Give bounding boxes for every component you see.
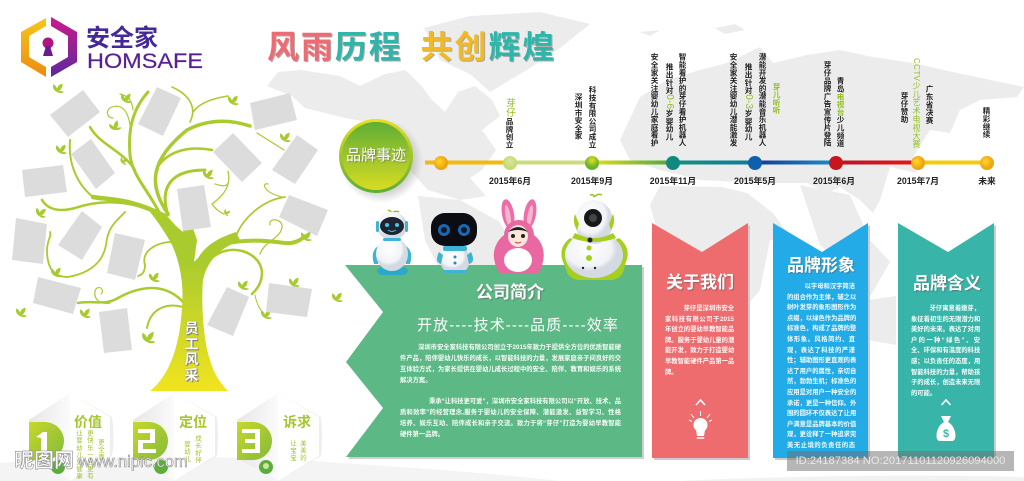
- icon: chevron: [696, 400, 705, 405]
- text: 芽仔是深圳市安全: [684, 305, 734, 312]
- value card 2: [133, 398, 218, 480]
- value card 1: [29, 397, 114, 480]
- logo: 安全家: [86, 25, 158, 52]
- timeline dates: 未来: [978, 176, 996, 186]
- text: 观，更诠释了一种追求完: [787, 431, 856, 438]
- timeline event text: 青岛 电视台 少儿频道: [836, 77, 845, 147]
- company description: [400, 343, 621, 438]
- text: 然，勃勃生机；标准色的: [787, 378, 856, 385]
- value card 3: [237, 398, 322, 480]
- text: 美无止境的负责任的态: [787, 442, 855, 449]
- text: 户满意是品牌基本的价值: [787, 421, 856, 428]
- values slogan: 开放----技术----品质----效率: [417, 317, 619, 334]
- text: 的组合作为主体，辅之以: [787, 294, 856, 301]
- text: 家科技有限公司于2015: [665, 316, 734, 323]
- timeline event text: 智能看护的芽仔看护机器人: [678, 53, 687, 147]
- timeline dates: 2015年6月: [813, 176, 855, 186]
- timeline event text: 芽仔赞助: [900, 92, 909, 123]
- company description: 深圳市安全家科技有限公司创立于2015年致力于提供全方位的优质智能硬: [418, 344, 621, 351]
- robot: pink rabbit: [494, 198, 544, 274]
- text: 年创立的婴幼早教智能品: [665, 326, 734, 333]
- timeline: [425, 156, 994, 170]
- panel: about us: [652, 223, 750, 460]
- timeline dates: 2015年7月: [897, 176, 939, 186]
- text: 能开发，致力于打造婴幼: [665, 347, 734, 354]
- text: [911, 304, 980, 397]
- text: [787, 282, 856, 449]
- icon: money bag: [937, 416, 955, 441]
- text: 观，表达了科技的严谨: [787, 347, 855, 354]
- logo: HOMSAFE: [87, 50, 203, 73]
- company description: 互体验方式，为家长提供在婴幼儿成长过程中的安全、陪伴、教育和娱乐的系统: [400, 366, 621, 373]
- panel: company profile: [345, 265, 644, 459]
- text: 的可能。: [911, 390, 936, 397]
- timeline dates: 2015年9月: [571, 176, 613, 186]
- value card 3: 让宝宝: [289, 440, 296, 461]
- text: 象征着初生的无限潜力和: [911, 316, 980, 323]
- timeline dates: 2015年11月: [650, 176, 696, 186]
- timeline event text: 推出针对 0-3 岁婴幼儿: [743, 63, 754, 140]
- tree branches: [42, 87, 306, 328]
- timeline dates: 2015年6月: [489, 176, 531, 186]
- text: 子的成长，创造未来无限: [911, 379, 980, 386]
- timeline event text: 精彩继续: [982, 107, 991, 138]
- text: 围的圆环不仅表达了让用: [787, 410, 856, 417]
- icon: chevron: [942, 400, 950, 405]
- leaves: [16, 84, 343, 343]
- title: 风雨历程 共创辉煌: [267, 29, 556, 65]
- timeline event text: 安全家关注婴幼儿潜能激发: [729, 53, 738, 147]
- robot: black screen: [431, 213, 477, 273]
- text: 牌。: [665, 369, 678, 376]
- photo frames: [12, 87, 328, 353]
- logo: [21, 17, 203, 77]
- text: 感；以负责任的态度，用: [911, 358, 980, 365]
- text: 户的一种“绿色”、安: [911, 337, 980, 344]
- value card 2: 成长好伴: [194, 435, 201, 463]
- panel heading: 公司简介: [476, 283, 544, 302]
- heading: 品牌含义: [913, 274, 981, 293]
- robots: [372, 194, 628, 280]
- value card 1: 让婴幼儿更健康: [75, 430, 82, 480]
- heading: 关于我们: [666, 273, 734, 292]
- value card 2: 定位: [179, 414, 207, 430]
- timeline event text: 科技有限公司成立: [588, 86, 597, 148]
- brand events circle: 品牌事迹: [346, 147, 406, 164]
- timeline event text: 深圳市安全家: [574, 93, 583, 140]
- text: 树叶发芽的象形图形作为: [787, 304, 856, 311]
- value card 1: 更全面: [97, 439, 104, 460]
- panel: brand image: [773, 223, 870, 460]
- company description: 解决方案。: [400, 377, 431, 384]
- timeline event text: 芽仔 品牌创立: [504, 98, 515, 149]
- tree trunk: [150, 212, 240, 391]
- tree heading: 员工风采: [184, 320, 198, 382]
- text: 美好的未来。表达了对用: [911, 326, 980, 333]
- timeline dates: 2015年5月: [734, 176, 776, 186]
- brand events circle: [339, 119, 420, 201]
- company description: 秉承“让科技更可爱”，深圳市安全家科技有限公司以“开放、技术、品: [429, 398, 621, 405]
- text: 性；辅助图形更直观的表: [787, 357, 856, 364]
- icon: money bag: $: [943, 428, 949, 440]
- company description: 培养、娱乐互动、陪伴成长和亲子交流。致力于将“芽仔”打造为婴幼早教智能: [400, 420, 621, 427]
- text: 以字母和汉字简洁: [805, 283, 855, 290]
- text: 应用是对用户一种安全的: [787, 389, 856, 396]
- value card 1: 更快乐一些更有: [86, 430, 93, 480]
- panel: brand meaning: [898, 223, 996, 460]
- icon: light bulb: [689, 411, 712, 438]
- timeline event text: CCTV少儿艺术电视大赛: [912, 58, 921, 149]
- text: 体形象。风格简约、直: [787, 336, 855, 343]
- text: 标准色，构成了品牌的整: [787, 325, 856, 332]
- timeline event text: 推出针对 0-6 岁婴幼儿: [664, 63, 675, 140]
- value card 3: 美美的: [299, 440, 306, 461]
- text: 全、环保和有温度的科技: [911, 347, 980, 354]
- employee tree with photo frames: [12, 84, 343, 391]
- watermark: site name: 昵图网 www.nipic.com: [14, 450, 188, 472]
- timeline dates: [489, 176, 996, 186]
- value card 2: 婴幼儿: [183, 441, 190, 462]
- text: [665, 304, 734, 376]
- text: 点缀，以绿色作为品牌的: [787, 315, 856, 322]
- timeline event text: 广东省决赛: [925, 85, 934, 124]
- text: 早教智能硬件产品第一品: [665, 358, 734, 365]
- watermark: image id bar: ID:24187384 NO:20171101120926094000: [796, 455, 1005, 467]
- timeline event text: 芽儿听听: [772, 83, 781, 114]
- watermark: image id bar: [787, 451, 1014, 471]
- robot: blue sprout: [373, 210, 411, 275]
- company description: 件产品，陪伴婴幼儿快乐的成长，以智能科技的力量，发展家庭亲子间良好的交: [400, 355, 621, 362]
- text: 承诺，更是一种信仰。外: [787, 400, 856, 407]
- company description: 质和效率”的经营理念,服务于婴幼儿的安全保障、潜能激发、益智学习、性格: [400, 409, 621, 416]
- text: 达了用户的属性，亲切自: [787, 368, 856, 375]
- value card 1: 价值: [74, 414, 102, 430]
- company description: 硬件第一品牌。: [400, 431, 444, 438]
- text: 牌。服务于婴幼儿童的潜: [665, 337, 734, 344]
- heading: 品牌形象: [787, 256, 855, 275]
- robot: green camera: [561, 194, 628, 280]
- timeline event text: 安全家关注婴幼儿家庭看护: [650, 53, 659, 147]
- text: 牙仔寓意着嫩芽，: [930, 305, 980, 312]
- timeline event text: 芽仔品牌广告宣传片登陆: [823, 61, 832, 147]
- text: 智能科技的力量，帮助孩: [911, 369, 980, 376]
- value card 3: 诉求: [283, 414, 311, 430]
- ground swoosh: [0, 458, 1024, 481]
- timeline event text: 潜能开发的潜能音乐机器人: [758, 53, 767, 147]
- timeline event text: [504, 52, 991, 149]
